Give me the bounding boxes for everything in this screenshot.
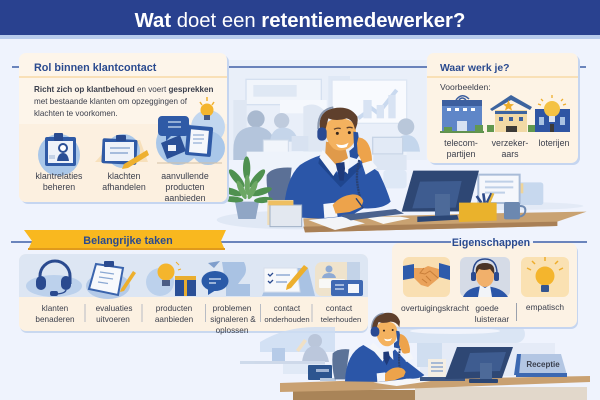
icon: klachten klembord <box>95 134 149 169</box>
icon: contactkaart <box>315 262 363 296</box>
main illustration: agent at desk <box>267 107 391 220</box>
label: problemen signaleren en oplossen: oplossen <box>216 326 249 335</box>
label: aanvullende producten aanbieden: aanbieden <box>164 193 206 203</box>
label: klanten benaderen: klanten <box>42 304 69 313</box>
panel: Eigenschappen <box>392 243 578 329</box>
heading banner: Belangrijke taken: Belangrijke taken <box>83 235 173 247</box>
label: contact telerhouden: telerhouden <box>321 315 361 324</box>
label: telecompartijen: telecom- <box>444 138 478 148</box>
label: goede luisteraar: goede <box>475 303 499 313</box>
panel: Waar werk je <box>427 53 580 165</box>
icon: handshake <box>403 257 450 297</box>
label: telecompartijen <box>444 138 478 159</box>
icon: pen holder and mug <box>459 193 525 222</box>
torso and arm <box>283 155 391 220</box>
icon: empathy lightbulb <box>521 257 569 297</box>
handset <box>349 132 361 159</box>
description text: klachten te voorkomen. <box>34 109 118 118</box>
label: telecompartijen: partijen <box>447 149 476 159</box>
section line: taken <box>11 241 587 243</box>
paper <box>373 379 433 386</box>
label: contact telerhouden <box>321 304 361 324</box>
label: producten aanbieden: producten <box>156 304 193 313</box>
collar <box>370 343 393 362</box>
description text: Richt zich op klantbehoud en voert gesprekken <box>34 85 214 94</box>
lower hand <box>377 372 387 382</box>
desk items behind monitor <box>478 175 543 205</box>
heading banner: Belangrijke taken <box>24 230 226 250</box>
label: klachten afhandelen: afhandelen <box>102 182 146 192</box>
label: contact onderhouden: onderhouden <box>264 315 310 324</box>
label: empatisch: empatisch <box>526 302 564 312</box>
torso and arm <box>345 345 424 382</box>
title banner <box>0 0 600 39</box>
lower cuff and hand <box>323 203 338 218</box>
label: klanten benaderen <box>35 304 75 324</box>
bottom reception desk <box>280 376 590 400</box>
section line: rol <box>12 66 586 68</box>
label: klachten afhandelen <box>102 171 146 192</box>
icon: reception monitor <box>420 347 513 383</box>
neck <box>325 142 348 169</box>
handset <box>394 331 402 349</box>
illustration: reception agent <box>332 313 433 386</box>
label: evaluaties uitvoeren: evaluaties <box>96 304 132 313</box>
icon: document behind monitor <box>428 359 446 378</box>
description text <box>34 85 214 118</box>
tie <box>383 351 390 365</box>
chair <box>332 349 349 379</box>
icon: checklist <box>262 265 315 296</box>
phone cord <box>357 160 361 203</box>
label: overtuigingskracht: overtuigingskracht <box>401 303 470 313</box>
icon: telecom building <box>440 96 484 132</box>
icon: luisteraar portrait <box>460 257 510 297</box>
label: evaluaties uitvoeren: uitvoeren <box>96 315 130 324</box>
icon: lamp en cadeau <box>146 262 196 296</box>
face <box>325 118 356 150</box>
label: loterijen: loterijen <box>539 138 570 148</box>
label: goede luisteraar <box>475 303 509 324</box>
label: aanvullende producten aanbieden <box>161 171 209 203</box>
label: problemen signaleren en oplossen <box>210 304 256 335</box>
icon: gloeilamp <box>200 97 214 120</box>
label: verzekeraars <box>492 138 528 159</box>
label: producten aanbieden: aanbieden <box>155 315 194 324</box>
icon: loterijen lightbulb <box>535 95 570 132</box>
heading: Waar werk je? <box>440 63 510 74</box>
label: contact onderhouden <box>264 304 310 324</box>
icon: spraakballon <box>202 261 250 296</box>
label: problemen signaleren en oplossen: signaleren & <box>210 315 256 324</box>
heading: Eigenschappen: Eigenschappen <box>452 237 530 249</box>
label: producten aanbieden <box>155 304 194 324</box>
tie <box>336 162 345 181</box>
icon: Receptie sign <box>514 354 567 377</box>
hand <box>399 334 410 354</box>
panel: Belangrijke taken <box>19 254 368 335</box>
label: aanvullende producten aanbieden: aanvullende <box>161 171 209 181</box>
hair <box>320 108 358 132</box>
panel: Rol binnen klantcontact <box>19 53 229 204</box>
label: klantrelaties beheren: klantrelaties <box>36 171 83 181</box>
label: klanten benaderen: benaderen <box>35 315 75 324</box>
label: klachten afhandelen: klachten <box>108 171 140 181</box>
icon: klantrelaties badge <box>38 133 80 176</box>
label: evaluaties uitvoeren <box>96 304 132 324</box>
chair <box>267 168 292 214</box>
label: verzekeraars: verzeker- <box>492 138 528 148</box>
heading: Rol binnen klantcontact <box>34 62 157 74</box>
label: problemen signaleren en oplossen: problemen <box>213 304 252 313</box>
icon: desktop monitor <box>402 171 479 222</box>
main desk <box>303 212 587 232</box>
keyboard and papers <box>308 209 410 230</box>
hair <box>372 313 400 332</box>
icon: desk plant <box>220 156 273 219</box>
collar <box>319 150 349 176</box>
icon: books on desk <box>308 365 336 381</box>
label: verzekeraars: aars <box>501 149 519 159</box>
hand on phone <box>357 137 372 164</box>
label: contact onderhouden: contact <box>274 304 301 313</box>
description text: met bestaande klanten om opzeggingen of <box>34 97 188 106</box>
voorbeelden label: Voorbeelden: <box>440 82 491 92</box>
icon: clipboard evaluaties <box>86 261 136 299</box>
icon: Receptie sign: Receptie <box>526 360 560 369</box>
label: klantrelaties beheren <box>36 171 83 192</box>
icon: verzekeraars building <box>487 95 535 132</box>
icon: headset <box>26 261 82 297</box>
label: klantrelaties beheren: beheren <box>43 182 75 192</box>
background office scene <box>217 60 583 229</box>
icon: aanvullende producten <box>156 97 225 165</box>
icon: paper holder <box>267 200 302 227</box>
label: aanvullende producten aanbieden: producten <box>165 182 205 192</box>
background reception scene <box>240 325 555 376</box>
label: goede luisteraar: luisteraar <box>475 314 509 324</box>
label: contact telerhouden: contact <box>326 304 353 313</box>
title banner: Wat doet een retentiemedewerker? <box>135 10 465 32</box>
face <box>376 322 397 346</box>
